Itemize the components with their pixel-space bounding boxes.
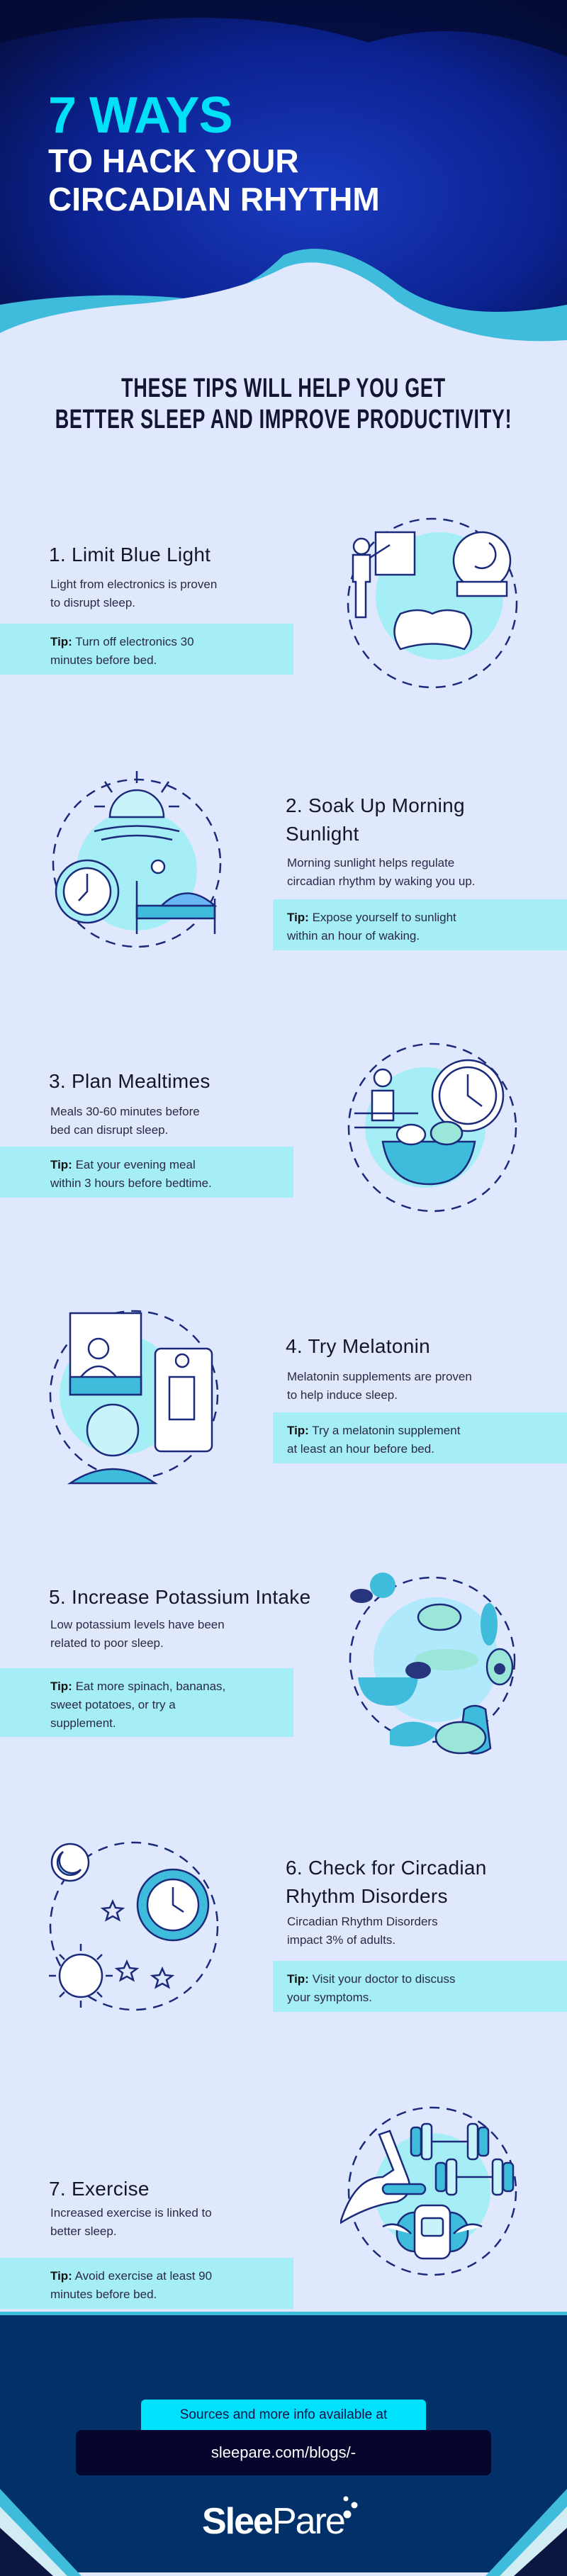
icon: meal and clock [347, 1043, 517, 1212]
section 2 heading: Sunlight [286, 823, 359, 845]
section 6 body: impact 3% of adults. [287, 1933, 395, 1947]
section 6 body [287, 1915, 438, 1947]
section 6 heading: 6. Check for Circadian [286, 1857, 487, 1879]
url box: sleepare.com/blogs/- [211, 2443, 356, 2461]
section 7 heading: 7. Exercise [49, 2178, 150, 2200]
section 1 tip: minutes before bed. [50, 653, 157, 667]
section 5 tip: supplement. [50, 1716, 116, 1730]
section 3 body [50, 1105, 200, 1137]
section 1 tip: Tip: Turn off electronics 30 [50, 635, 194, 648]
subtitle [55, 373, 512, 434]
section 3 tip: Tip: Eat your evening meal [50, 1158, 196, 1171]
section 2 heading [286, 794, 465, 845]
section 1 body: Light from electronics is proven [50, 578, 217, 591]
title: TO HACK YOUR [48, 142, 299, 179]
section 5 tip: sweet potatoes, or try a [50, 1698, 176, 1711]
url box [76, 2430, 491, 2475]
section 6 body: Circadian Rhythm Disorders [287, 1915, 438, 1928]
logo: SleePare [202, 2501, 344, 2542]
subtitle: THESE TIPS WILL HELP YOU GET [121, 373, 446, 403]
section 3 heading: 3. Plan Mealtimes [49, 1070, 210, 1092]
section 5 tip [0, 1668, 293, 1737]
section 1 tip [0, 624, 293, 675]
section 5 body: related to poor sleep. [50, 1636, 164, 1650]
subtitle: BETTER SLEEP AND IMPROVE PRODUCTIVITY! [55, 405, 512, 434]
icon: sunrise, alarm clock, bed [52, 771, 221, 948]
section 6 tip: your symptoms. [287, 1991, 372, 2004]
section 1 body [50, 578, 217, 609]
section 3 body: Meals 30-60 minutes before [50, 1105, 200, 1118]
section 5 heading: 5. Increase Potassium Intake [49, 1586, 310, 1608]
section 6 heading [286, 1857, 487, 1907]
section 2 body [287, 856, 476, 888]
icon: melatonin bottle, sleeper [50, 1310, 218, 1484]
section 1 body: to disrupt sleep. [50, 596, 135, 609]
title: CIRCADIAN RHYTHM [48, 181, 380, 218]
section 7 body: Increased exercise is linked to [50, 2206, 212, 2220]
section 4 tip: at least an hour before bed. [287, 1442, 434, 1456]
section 5 body [50, 1618, 225, 1650]
footer [0, 2312, 567, 2572]
section 2 body: Morning sunlight helps regulate [287, 856, 454, 870]
section 4 body: to help induce sleep. [287, 1388, 398, 1402]
title: 7 WAYS [48, 87, 232, 144]
section 6 tip [273, 1961, 567, 2012]
section 3 body: bed can disrupt sleep. [50, 1123, 168, 1137]
section 2 heading: 2. Soak Up Morning [286, 794, 465, 816]
section 2 tip: within an hour of waking. [287, 929, 420, 943]
section 6 tip: Tip: Visit your doctor to discuss [287, 1972, 455, 1986]
section 7 body: better sleep. [50, 2225, 117, 2238]
section 2 tip: Tip: Expose yourself to sunlight [287, 911, 456, 924]
section 4 body: Melatonin supplements are proven [287, 1370, 472, 1383]
section 4 heading: 4. Try Melatonin [286, 1335, 430, 1357]
section 3 tip [0, 1147, 293, 1198]
icon: clock cycle, moon and sun [49, 1841, 218, 2011]
section 6 heading: Rhythm Disorders [286, 1885, 448, 1907]
section 2 body: circadian rhythm by waking you up. [287, 874, 476, 888]
sources label: Sources and more info available at [180, 2407, 387, 2422]
section 7 tip: minutes before bed. [50, 2288, 157, 2301]
section 4 tip [273, 1412, 567, 1463]
section 4 tip: Tip: Try a melatonin supplement [287, 1424, 460, 1437]
section 7 tip [0, 2258, 293, 2309]
section 2 tip [273, 899, 567, 950]
icon: blue light (person, globe, sleep mask) [347, 517, 517, 689]
section 7 tip: Tip: Avoid exercise at least 90 [50, 2269, 212, 2283]
header: photo background with wave [0, 0, 567, 342]
section 5 body: Low potassium levels have been [50, 1618, 225, 1631]
section 1 heading: 1. Limit Blue Light [49, 544, 210, 566]
icon: dumbbells, arm, fitness tracker [340, 2106, 517, 2276]
icon: potassium-rich foods [349, 1573, 516, 1755]
title [48, 87, 380, 218]
section 7 body [50, 2206, 212, 2238]
section 3 tip: within 3 hours before bedtime. [50, 1176, 212, 1190]
sources label [141, 2400, 426, 2431]
section 4 body [287, 1370, 472, 1402]
section 5 tip: Tip: Eat more spinach, bananas, [50, 1680, 225, 1693]
